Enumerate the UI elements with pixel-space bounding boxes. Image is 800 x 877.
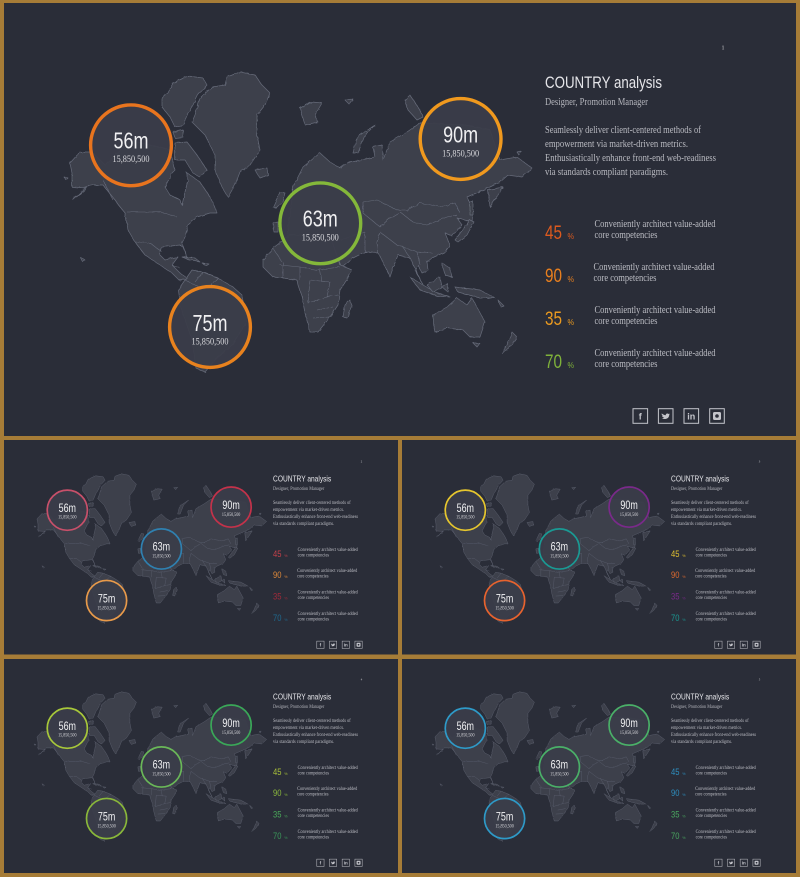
bubble: 56m: 15,850,500 [58, 734, 77, 739]
bubble: 63m: 63m [153, 542, 170, 554]
bubble: 63m: 63m [153, 760, 170, 772]
stat: 45%: 45 [671, 549, 680, 560]
stat: 45%: % [284, 553, 288, 558]
stat: 35%: Conveniently architect value-added [594, 305, 716, 316]
stat: 45% [671, 547, 756, 560]
paragraph: empowerment via market-driven metrics. [671, 507, 742, 513]
bubble: 75m: 75m [496, 594, 513, 606]
bubble: 90m: 90m [443, 122, 478, 148]
stat: 45%: Conveniently architect value-added [594, 219, 716, 230]
bubble: 90m [609, 487, 649, 527]
bubble: 90m: 15,850,500 [620, 513, 639, 518]
stat: 45%: Conveniently architect value-added [298, 765, 358, 771]
bubble: 90m [211, 705, 251, 745]
stat: 90%: 90 [273, 788, 282, 799]
bubble: 63m: 15,850,500 [302, 233, 339, 243]
stat: 45%: Conveniently architect value-added [696, 547, 756, 553]
social icons: in [344, 860, 348, 865]
stat: 70%: % [284, 835, 288, 840]
panel: slide 3 content [432, 460, 761, 648]
bubble: 56m: 15,850,500 [58, 516, 77, 521]
stat: 45%: 45 [273, 549, 282, 560]
social icons: f [718, 642, 720, 647]
stat: 70%: Conveniently architect value-added [298, 611, 358, 617]
paragraph: Enthusiastically enhance front-end web-readiness [273, 513, 358, 520]
stat: 45%: Conveniently architect value-added [696, 765, 756, 771]
bubble: 56m: 15,850,500 [112, 155, 150, 165]
stat: 70%: 70 [273, 831, 282, 842]
panel: slide 4 background [4, 659, 398, 873]
stat: 90%: core competencies [297, 792, 328, 798]
stat: 90% [671, 568, 756, 581]
bubble: 56m: 56m [114, 128, 148, 154]
paragraph: via standards compliant paradigms. [273, 521, 334, 527]
stat: 35%: Conveniently architect value-added [696, 808, 756, 814]
social icons: in [742, 642, 746, 647]
paragraph: Enthusiastically enhance front-end web-readiness [545, 153, 716, 164]
social icons: in [687, 411, 695, 421]
stat: 35% [545, 305, 716, 330]
stat: 35%: % [284, 814, 288, 819]
bubble: 63m: 15,850,500 [152, 554, 171, 559]
bubble: 56m: 15,850,500 [456, 516, 475, 521]
bubble: 56m: 56m [59, 721, 76, 733]
bubble: 75m: 15,850,500 [495, 606, 514, 611]
page number: 1 [722, 46, 724, 52]
stat: 45%: 45 [671, 767, 680, 778]
world map [432, 692, 665, 841]
social icons [715, 641, 760, 648]
bubble: 90m: 15,850,500 [222, 513, 241, 518]
world map [34, 692, 267, 841]
stat: 90% [671, 786, 756, 799]
paragraph: empowerment via market-driven metrics. [545, 139, 688, 150]
stat: 70%: Conveniently architect value-added [298, 829, 358, 835]
stat: 90%: Conveniently architect value-added [695, 786, 756, 792]
paragraph [273, 717, 358, 745]
bubble: 56m [91, 105, 171, 186]
bubble: 75m: 75m [192, 310, 228, 336]
stat: 90%: Conveniently architect value-added [297, 786, 358, 792]
stat: 70%: 70 [671, 831, 680, 842]
bubble: 56m [445, 708, 485, 748]
stat: 35%: % [568, 318, 574, 327]
paragraph: Seamlessly deliver client-centered methods of [545, 125, 701, 136]
stat: 70%: 70 [545, 352, 562, 373]
stat: 35%: 35 [671, 592, 680, 603]
stat: 90%: % [682, 792, 686, 797]
bubble: 56m: 56m [59, 503, 76, 515]
title: COUNTRY analysis [273, 475, 331, 484]
bubble: 63m [141, 529, 181, 569]
world map [64, 72, 532, 372]
bubble: 56m [47, 708, 87, 748]
stat: 45%: % [682, 771, 686, 776]
bubble: 56m [445, 490, 485, 530]
stat: 90%: 90 [273, 570, 282, 581]
panel: slide 4 content [34, 678, 363, 866]
page number: 2 [361, 460, 363, 464]
stat: 35% [671, 808, 756, 821]
bubble: 90m: 15,850,500 [620, 731, 639, 736]
bubble: 75m: 75m [98, 812, 115, 824]
bubble: 63m [141, 747, 181, 787]
panel: slide 5 content [432, 678, 761, 866]
stat: 70%: core competencies [594, 359, 658, 370]
stat: 90%: 90 [545, 266, 562, 287]
stat: 35% [273, 808, 358, 821]
bubble: 75m: 75m [98, 594, 115, 606]
panel: slide 2 background [4, 440, 398, 654]
subtitle: Designer, Promotion Manager [273, 705, 325, 710]
panel: slide 2 content [34, 460, 363, 648]
bubble: 75m [484, 580, 525, 621]
stat: 70%: Conveniently architect value-added [696, 829, 756, 835]
stat: 35%: % [284, 596, 288, 601]
bubble: 90m: 15,850,500 [222, 731, 241, 736]
stat: 35% [671, 590, 756, 603]
stat: 70%: core competencies [298, 834, 329, 840]
title: COUNTRY analysis [545, 74, 662, 92]
subtitle: Designer, Promotion Manager [545, 97, 649, 108]
stat: 35%: 35 [273, 810, 282, 821]
stat: 35%: Conveniently architect value-added [696, 590, 756, 596]
social icons: in [344, 642, 348, 647]
stat: 35%: 35 [671, 810, 680, 821]
world map [432, 474, 665, 623]
stat: 90% [545, 262, 715, 287]
stat: 70% [671, 829, 756, 842]
bubble: 63m: 15,850,500 [550, 772, 569, 777]
stat: 90%: % [568, 275, 574, 284]
stat: 35%: core competencies [696, 813, 727, 819]
stat: 90%: % [682, 574, 686, 579]
paragraph: via standards compliant paradigms. [273, 739, 334, 745]
stat: 90% [273, 786, 358, 799]
stat: 70%: Conveniently architect value-added [696, 611, 756, 617]
bubble: 75m: 15,850,500 [192, 338, 229, 348]
stat: 35%: Conveniently architect value-added [298, 808, 358, 814]
paragraph [671, 717, 756, 745]
stat: 90%: 90 [671, 788, 680, 799]
subtitle: Designer, Promotion Manager [671, 705, 723, 710]
bubble: 90m: 15,850,500 [442, 150, 479, 160]
bubble: 75m: 75m [496, 812, 513, 824]
social icons [633, 409, 724, 423]
bubble: 75m [86, 798, 127, 839]
bubble: 90m: 90m [620, 500, 638, 512]
paragraph: Enthusiastically enhance front-end web-readiness [273, 731, 358, 738]
bubble: 63m: 63m [303, 206, 338, 232]
bubble: 56m [47, 490, 87, 530]
stat: 35%: core competencies [696, 595, 727, 601]
stat: 45% [273, 765, 358, 778]
stat: 70%: core competencies [298, 616, 329, 622]
stat: 35% [273, 590, 358, 603]
title: COUNTRY analysis [671, 475, 729, 484]
stat: 70% [273, 829, 358, 842]
bubble: 75m [484, 798, 525, 839]
bubble: 75m [86, 580, 127, 621]
stat: 70% [273, 611, 358, 624]
stat: 45%: % [682, 553, 686, 558]
stat: 35%: 35 [545, 309, 562, 330]
page number: 4 [361, 678, 363, 682]
stat: 70%: core competencies [696, 616, 727, 622]
paragraph [671, 499, 756, 527]
paragraph: empowerment via market-driven metrics. [671, 725, 742, 731]
bubble: 63m [539, 747, 579, 787]
stat: 90%: % [284, 574, 288, 579]
stat: 70% [671, 611, 756, 624]
stat: 45%: core competencies [594, 230, 658, 241]
social icons: f [718, 860, 720, 865]
stat: 35%: % [682, 596, 686, 601]
stat: 35%: core competencies [298, 595, 329, 601]
paragraph: Seamlessly deliver client-centered methods of [671, 499, 749, 506]
stat: 90%: 90 [671, 570, 680, 581]
bubble: 63m: 15,850,500 [152, 772, 171, 777]
stat: 45%: % [568, 232, 574, 241]
stat: 70%: % [682, 835, 686, 840]
world map [34, 474, 267, 623]
stat: 45%: core competencies [696, 552, 727, 558]
bubble: 63m: 63m [551, 760, 568, 772]
social icons [317, 859, 362, 866]
panel: slide 3 background [402, 440, 796, 654]
bubble: 90m [420, 99, 501, 179]
stat: 90%: core competencies [594, 273, 656, 284]
stat: 45% [273, 547, 358, 560]
bubble: 90m: 90m [620, 718, 638, 730]
page number: 3 [759, 460, 761, 464]
stat: 90% [273, 568, 358, 581]
stat: 70% [545, 348, 716, 373]
bubble: 75m [170, 287, 250, 367]
page number: 5 [759, 678, 761, 682]
stat: 45%: 45 [273, 767, 282, 778]
bubble: 56m: 56m [457, 721, 474, 733]
stat: 45%: % [284, 771, 288, 776]
stat: 35%: 35 [273, 592, 282, 603]
paragraph: Seamlessly deliver client-centered methods of [273, 499, 351, 506]
paragraph: Enthusiastically enhance front-end web-readiness [671, 731, 756, 738]
paragraph: Seamlessly deliver client-centered methods of [671, 717, 749, 724]
bubble: 75m: 15,850,500 [97, 606, 116, 611]
bubble: 63m [280, 183, 361, 264]
stat: 35%: core competencies [594, 316, 658, 327]
stat: 35%: core competencies [298, 813, 329, 819]
bubble: 63m: 15,850,500 [550, 554, 569, 559]
stat: 45%: core competencies [696, 770, 727, 776]
social icons: in [742, 860, 746, 865]
stat: 45% [545, 219, 716, 244]
paragraph: via standards compliant paradigms. [671, 739, 732, 745]
stat: 35%: Conveniently architect value-added [298, 590, 358, 596]
stat: 70%: % [284, 617, 288, 622]
bubble: 90m [211, 487, 251, 527]
stat: 90%: core competencies [297, 574, 328, 580]
bubble: 90m: 90m [222, 718, 240, 730]
stat: 35%: % [682, 814, 686, 819]
stat: 70%: 70 [671, 613, 680, 624]
stat: 90%: % [284, 792, 288, 797]
paragraph [273, 499, 358, 527]
bubble: 63m [539, 529, 579, 569]
stat: 45%: Conveniently architect value-added [298, 547, 358, 553]
stat: 70%: % [568, 361, 574, 370]
title: COUNTRY analysis [273, 693, 331, 702]
paragraph: via standards compliant paradigms. [545, 167, 668, 178]
social icons [317, 641, 362, 648]
paragraph: empowerment via market-driven metrics. [273, 725, 344, 731]
paragraph: Enthusiastically enhance front-end web-readiness [671, 513, 756, 520]
bubble: 63m: 63m [551, 542, 568, 554]
stat: 45% [671, 765, 756, 778]
social icons: f [320, 860, 322, 865]
stat: 90%: core competencies [695, 792, 726, 798]
paragraph [545, 125, 716, 178]
subtitle: Designer, Promotion Manager [671, 487, 723, 492]
bubble: 56m: 56m [457, 503, 474, 515]
subtitle: Designer, Promotion Manager [273, 487, 325, 492]
stat: 70%: Conveniently architect value-added [594, 348, 716, 359]
stat: 90%: Conveniently architect value-added [594, 262, 715, 273]
paragraph: via standards compliant paradigms. [671, 521, 732, 527]
stat: 90%: core competencies [695, 574, 726, 580]
social icons: f [320, 642, 322, 647]
paragraph: Seamlessly deliver client-centered methods of [273, 717, 351, 724]
panel: main slide [4, 3, 796, 436]
paragraph: empowerment via market-driven metrics. [273, 507, 344, 513]
title: COUNTRY analysis [671, 693, 729, 702]
bubble: 75m: 15,850,500 [97, 824, 116, 829]
bubble: 90m: 90m [222, 500, 240, 512]
stat: 90%: Conveniently architect value-added [297, 568, 358, 574]
social icons: f [639, 411, 643, 421]
stat: 70%: % [682, 617, 686, 622]
bubble: 75m: 15,850,500 [495, 824, 514, 829]
panel: slide 5 background [402, 659, 796, 873]
stat: 45%: core competencies [298, 770, 329, 776]
stat: 70%: 70 [273, 613, 282, 624]
bubble: 90m [609, 705, 649, 745]
social icons [715, 859, 760, 866]
stat: 45%: core competencies [298, 552, 329, 558]
stat: 45%: 45 [545, 223, 562, 244]
stat: 90%: Conveniently architect value-added [695, 568, 756, 574]
bubble: 56m: 15,850,500 [456, 734, 475, 739]
stat: 70%: core competencies [696, 834, 727, 840]
